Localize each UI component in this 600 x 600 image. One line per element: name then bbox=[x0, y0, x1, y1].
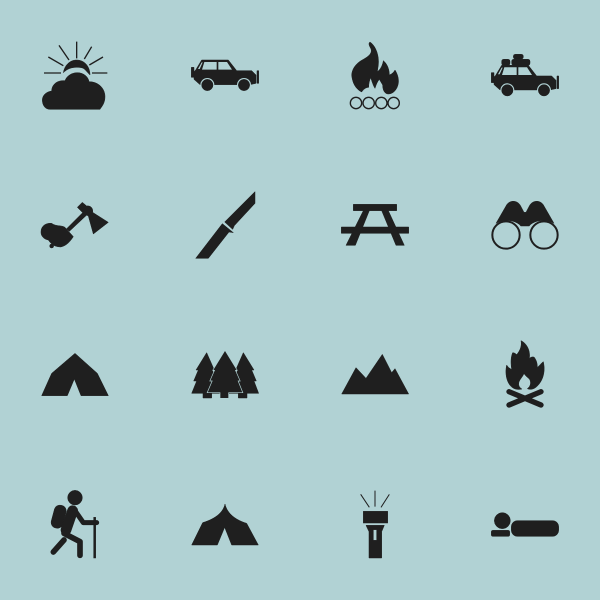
icon: car bbox=[191, 60, 259, 92]
icon: person in sleeping bag bbox=[491, 513, 559, 536]
icon: pine trees bbox=[192, 351, 259, 398]
icon: sun behind cloud bbox=[42, 42, 107, 109]
icon: tent bbox=[42, 353, 108, 396]
icon: axe in hand bbox=[41, 202, 108, 248]
icon: picnic table bbox=[341, 204, 409, 245]
icon: flashlight bbox=[361, 491, 389, 558]
icon: pointed tent bbox=[192, 504, 258, 545]
icon: campfire with crossed logs bbox=[506, 341, 544, 405]
icon: knife bbox=[196, 192, 255, 258]
icon: mountains bbox=[342, 354, 409, 394]
icon: hiker bbox=[50, 490, 97, 558]
icon: bonfire on logs bbox=[350, 42, 399, 109]
icon: off-road car with roof rack bbox=[491, 54, 559, 97]
icon: binoculars bbox=[492, 201, 558, 249]
